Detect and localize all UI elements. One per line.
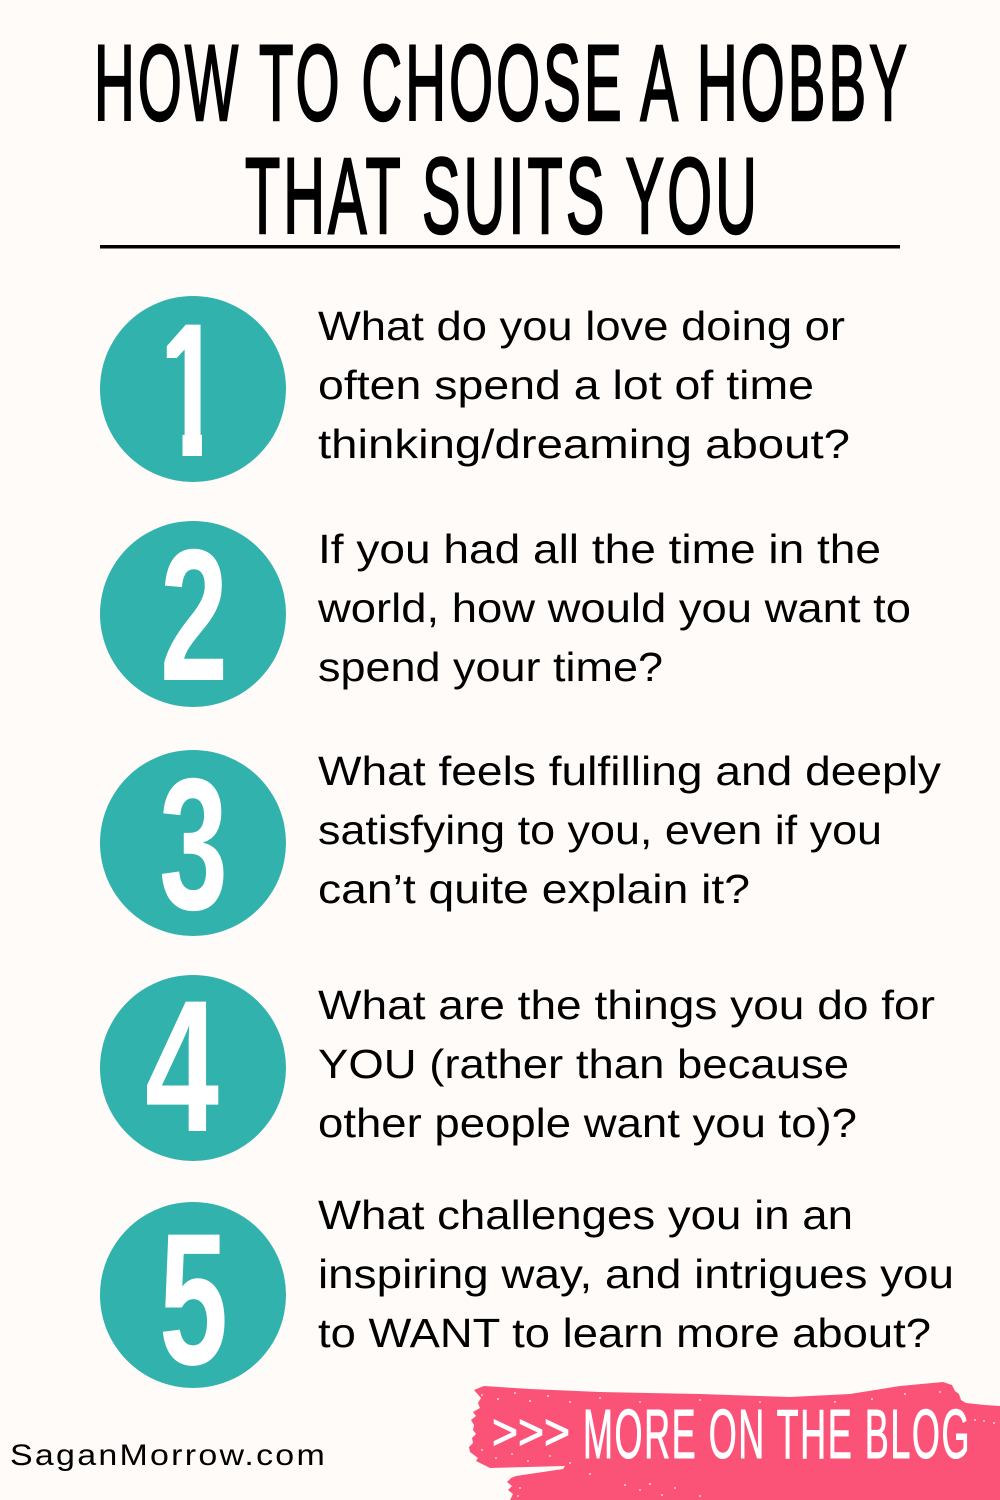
website name: SaganMorrow.com — [10, 1439, 327, 1472]
question 2: If you had all the time in the — [318, 526, 881, 572]
number badge 3: 3 — [159, 739, 228, 949]
question 4: What are the things you do for — [318, 982, 935, 1028]
number badge 5: 5 — [159, 1194, 228, 1404]
item 1 — [100, 296, 848, 482]
question 3: What feels fulfilling and deeply — [318, 748, 942, 794]
question 2 — [317, 526, 911, 690]
question 1: often spend a lot of time — [318, 362, 814, 408]
question 1: thinking/dreaming about? — [318, 421, 850, 467]
button label: >>> — [492, 1404, 570, 1460]
item 2 — [100, 510, 911, 720]
question 3: satisfying to you, even if you — [318, 807, 882, 853]
question 3: can’t quite explain it? — [318, 866, 750, 912]
question 4: YOU (rather than because — [318, 1041, 849, 1087]
question 1: What do you love doing or — [318, 303, 845, 349]
number badge 2: 2 — [160, 510, 228, 720]
brush speckles — [481, 1391, 995, 1497]
number badge 4 — [100, 961, 286, 1171]
question 1 — [318, 303, 850, 467]
question 5: What challenges you in an — [318, 1192, 853, 1238]
number badge 1: 1 — [160, 285, 220, 495]
question 4 — [318, 982, 935, 1146]
number badge 3 — [100, 739, 286, 949]
number badge 5 — [100, 1194, 286, 1404]
question 4: other people want you to)? — [318, 1100, 857, 1146]
number badge 4: 4 — [145, 961, 219, 1171]
item 5 — [100, 1192, 954, 1404]
question 5: to WANT to learn more about? — [318, 1310, 931, 1356]
item 3 — [100, 739, 942, 949]
question 5: inspiring way, and intrigues you — [318, 1251, 954, 1297]
item 4 — [100, 961, 935, 1171]
brush stroke — [469, 1382, 1000, 1500]
question 2: spend your time? — [318, 644, 663, 690]
question 3 — [318, 748, 942, 912]
call to action banner — [469, 1382, 1000, 1500]
title — [94, 22, 910, 256]
number badge 2 — [100, 510, 286, 720]
question 2: world, how would you want to — [317, 585, 911, 631]
number badge 1 — [100, 296, 286, 482]
question 5 — [318, 1192, 954, 1356]
